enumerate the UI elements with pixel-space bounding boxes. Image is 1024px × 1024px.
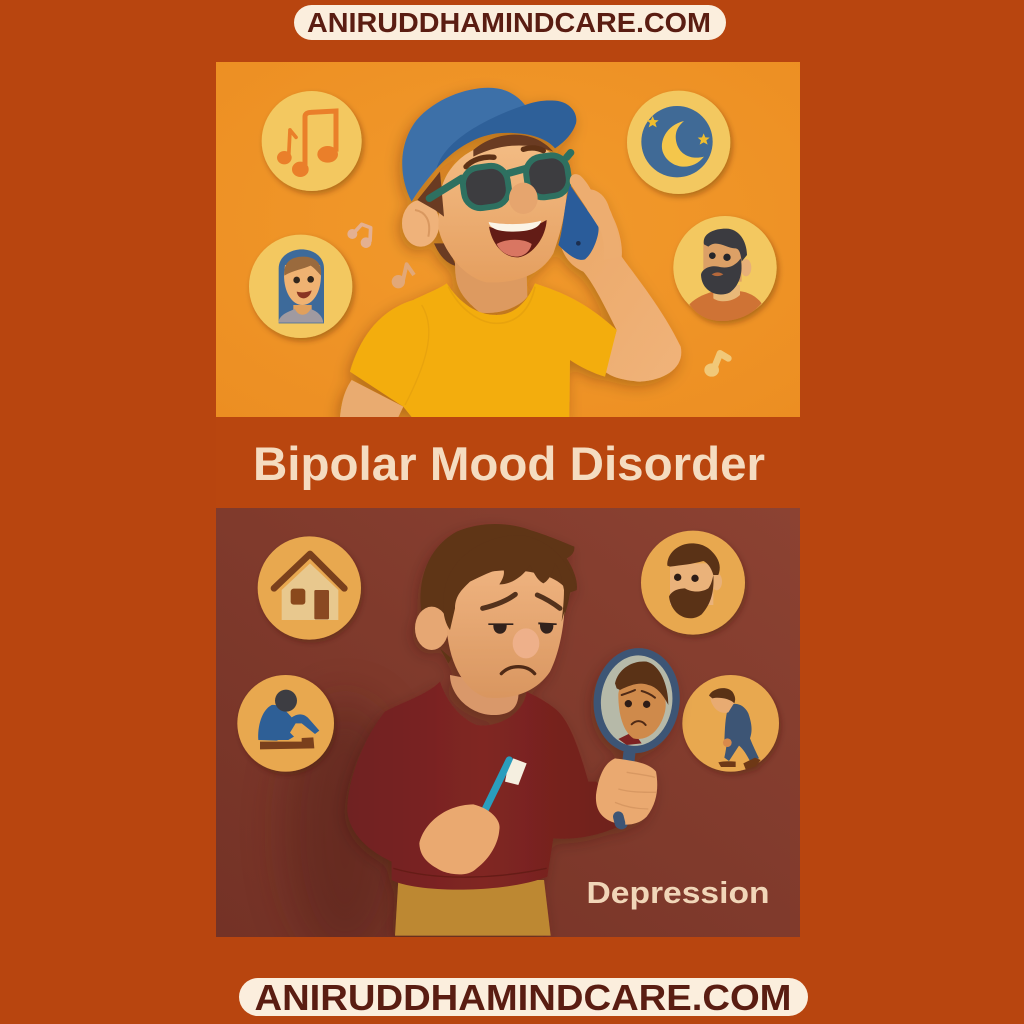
icon: small music notes bbox=[347, 224, 414, 288]
bottom website pill: ANIRUDDHAMINDCARE.COM bbox=[254, 977, 792, 1018]
face bbox=[446, 570, 565, 698]
icon: bearded man badge bbox=[641, 531, 745, 635]
icon: woman portrait badge bbox=[249, 235, 352, 338]
neck bbox=[450, 675, 519, 715]
figure: sad man with mirror bbox=[347, 524, 681, 936]
label: Depression bbox=[586, 875, 770, 910]
figure: manic man on phone bbox=[340, 88, 681, 417]
right hand bbox=[596, 758, 657, 825]
raised arm and hand bbox=[560, 203, 681, 382]
top website pill: ANIRUDDHAMINDCARE.COM bbox=[307, 7, 711, 38]
t-shirt bbox=[350, 283, 617, 417]
mouth bbox=[489, 220, 547, 257]
heading band bbox=[216, 417, 800, 508]
icon: person slumped at table badge bbox=[237, 675, 334, 772]
eyes bbox=[488, 622, 557, 634]
icon: house badge bbox=[258, 536, 361, 640]
back hair bbox=[434, 243, 456, 266]
fringe bbox=[444, 570, 574, 630]
hair wisp bbox=[440, 648, 452, 663]
eyebrows bbox=[466, 148, 543, 167]
panel shading bbox=[284, 701, 396, 937]
hair back bbox=[416, 524, 577, 616]
ear bbox=[402, 200, 439, 247]
left hand bbox=[419, 804, 500, 874]
heading: Bipolar Mood Disorder bbox=[253, 437, 765, 490]
neck bbox=[455, 260, 527, 313]
panel: mania illustration bbox=[216, 62, 800, 417]
cap crown bbox=[402, 88, 525, 202]
icon: music notes badge bbox=[262, 91, 362, 191]
cap brim bbox=[437, 100, 576, 168]
head bbox=[438, 142, 567, 282]
icon: hunched walking person badge bbox=[682, 675, 779, 772]
hair bbox=[417, 135, 553, 217]
toothbrush bbox=[483, 758, 527, 813]
fingers bbox=[566, 174, 613, 227]
left forearm bbox=[340, 380, 403, 417]
panel: depression illustration bbox=[216, 508, 800, 960]
eyebrows bbox=[483, 594, 560, 608]
trousers bbox=[395, 880, 551, 936]
ear bbox=[415, 607, 448, 650]
mouth bbox=[501, 667, 535, 674]
phone bbox=[558, 185, 599, 260]
icon: moon and stars badge bbox=[627, 91, 730, 194]
nose bbox=[509, 183, 538, 214]
icon: bearded man badge bbox=[673, 216, 777, 321]
nose bbox=[513, 628, 539, 658]
mirror bbox=[592, 648, 681, 823]
sweater bbox=[347, 682, 618, 890]
sunglasses bbox=[429, 153, 571, 210]
icon: small yellow note bbox=[704, 353, 728, 377]
